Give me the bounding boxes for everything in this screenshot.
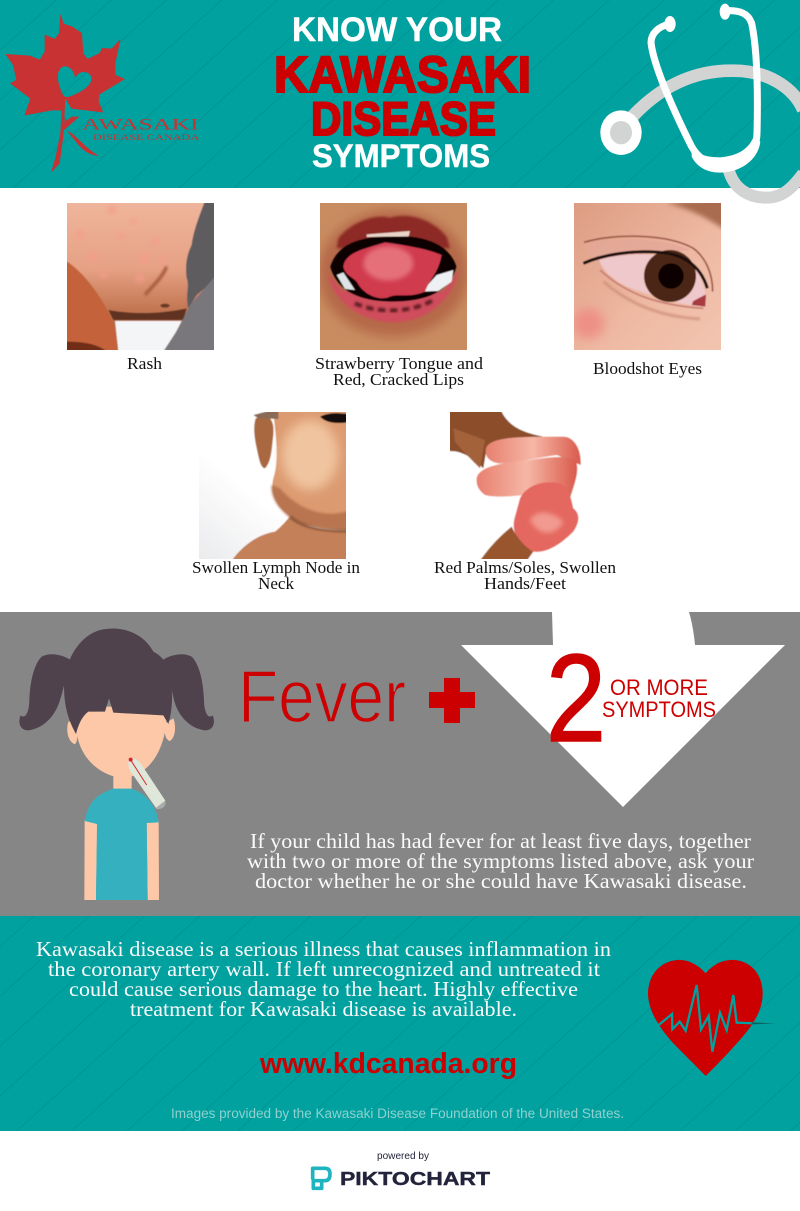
text: powered by: powered by — [377, 1151, 429, 1162]
panel: fever criteria background — [0, 612, 800, 916]
text: 2 or more symptoms — [546, 630, 716, 768]
arrow pointing down — [461, 612, 785, 807]
text: about Kawasaki disease — [36, 937, 612, 1021]
photo: rash — [67, 203, 214, 350]
text: Piktochart: PIKTOCHART — [340, 1169, 490, 1189]
pigtails — [19, 654, 214, 730]
text: about Kawasaki disease: Kawasaki disease is a serious illness that causes inflammation in — [36, 937, 612, 961]
arms — [84, 820, 159, 900]
caption: Strawberry Tongue — [315, 354, 484, 389]
caption: Bloodshot Eyes: Bloodshot Eyes — [593, 359, 702, 378]
photo: swollen lymph node in neck — [199, 412, 346, 559]
link: website: www.kdcanada.org — [259, 1048, 517, 1080]
text: about Kawasaki disease: could cause serious damage to the heart. Highly effective — [69, 977, 578, 1001]
caption: Strawberry Tongue: Strawberry Tongue and — [315, 354, 484, 373]
panel: symptoms — [60, 196, 728, 593]
hair — [64, 629, 172, 734]
text: image credit: Images provided by the Kawasaki Disease Foundation of the United States. — [171, 1106, 624, 1121]
thermometer — [128, 758, 165, 808]
title line: Symptoms: SYMPTOMS — [312, 138, 490, 174]
face — [76, 707, 167, 778]
title line: Know Your: KNOW YOUR — [292, 11, 502, 49]
title — [274, 11, 531, 174]
number 2: 2 — [546, 630, 606, 768]
text: Fever: Fever — [238, 655, 406, 738]
photo: red palms and soles — [450, 412, 582, 559]
logo wordmark: KAWASAKI: AWASAKI — [82, 116, 199, 133]
shirt — [85, 789, 159, 900]
caption: Red Palms/Soles: Hands/Feet — [484, 574, 566, 593]
icon: logo K swoosh — [63, 117, 99, 156]
panel: about background — [0, 916, 800, 1131]
icon: maple leaf with heart — [6, 15, 124, 172]
logo wordmark: Disease Canada: DISEASE CANADA — [93, 133, 199, 142]
photo: bloodshot eye — [574, 203, 721, 350]
photo: strawberry tongue and cracked lips — [320, 203, 467, 350]
icon: plus — [429, 678, 475, 723]
footer: powered by Piktochart — [313, 1151, 490, 1189]
logo: Kawasaki Disease Canada — [6, 15, 199, 172]
caption: Swollen Lymph Node — [192, 558, 360, 593]
caption: Red Palms/Soles: Red Palms/Soles, Swollen — [434, 558, 617, 577]
caption: Swollen Lymph Node: Swollen Lymph Node in — [192, 558, 360, 577]
title line: Kawasaki: KAWASAKI — [274, 46, 531, 103]
caption: Swollen Lymph Node: Neck — [258, 574, 294, 593]
panel: header background — [0, 0, 800, 188]
neck — [113, 772, 132, 792]
illustration: girl with thermometer — [19, 629, 214, 900]
icon: heart with heartbeat — [648, 960, 775, 1076]
label: or more: OR MORE — [610, 675, 708, 700]
caption: Red Palms/Soles — [434, 558, 617, 593]
text: fever explanation: doctor whether he or she could have Kawasaki disease. — [255, 869, 747, 893]
ears — [67, 718, 175, 744]
caption: Rash: Rash — [127, 354, 163, 373]
title line: Disease: DISEASE — [311, 92, 496, 145]
text: fever explanation — [247, 829, 754, 893]
icon: Piktochart logo — [313, 1168, 330, 1188]
text: about Kawasaki disease: treatment for Kawasaki disease is available. — [130, 997, 517, 1021]
icon: stethoscope — [600, 4, 800, 198]
text: fever explanation: If your child has had fever for at least five days, together — [250, 829, 751, 853]
text: about Kawasaki disease: the coronary artery wall. If left unrecognized and untreated it — [48, 957, 600, 981]
label: symptoms: SYMPTOMS — [602, 697, 716, 722]
caption: Strawberry Tongue: Red, Cracked Lips — [333, 370, 464, 389]
text: fever explanation: with two or more of the symptoms listed above, ask your — [247, 849, 754, 873]
